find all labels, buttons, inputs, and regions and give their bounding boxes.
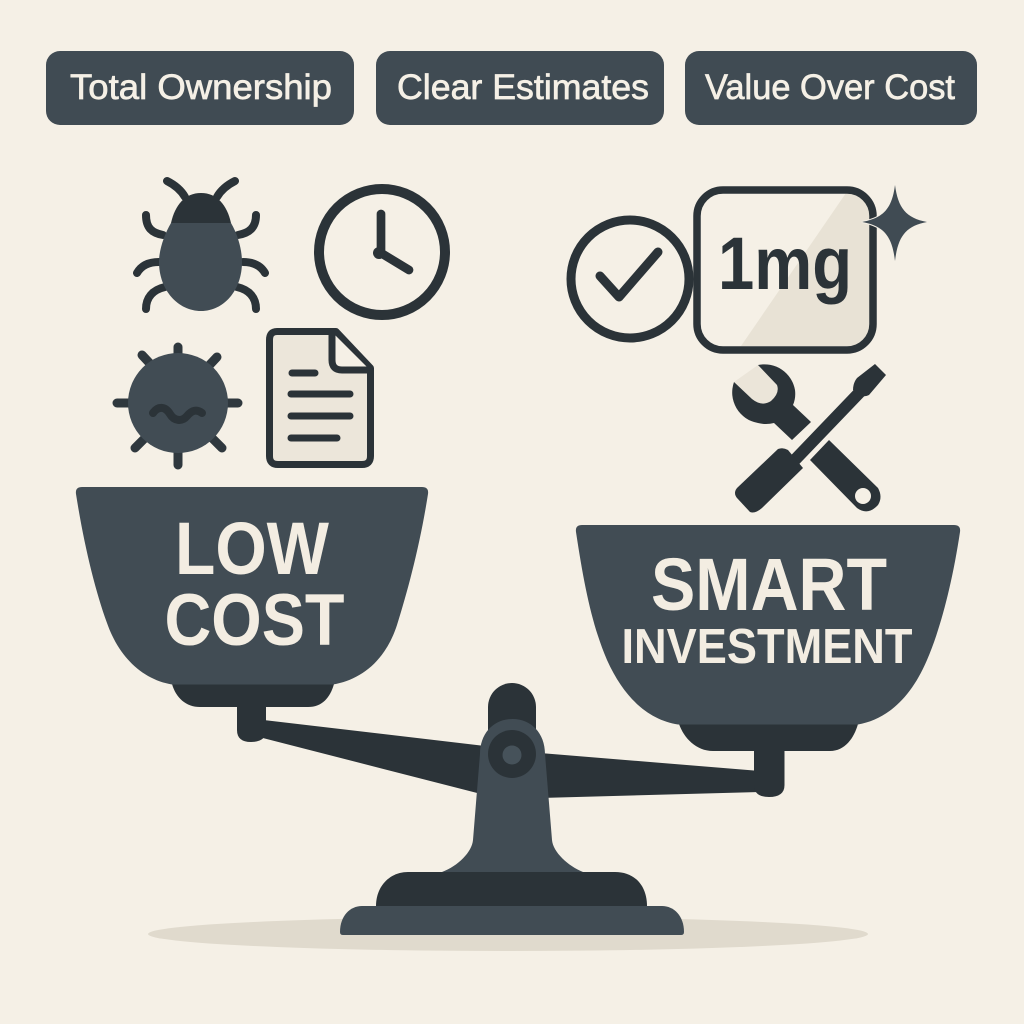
icon: 1mg box: 1mg: [718, 222, 852, 305]
icon: bug: [137, 181, 265, 311]
pill: Clear Estimates: Clear Estimates: [397, 68, 649, 107]
pill: Value Over Cost: [685, 51, 977, 125]
pill: Value Over Cost: Value Over Cost: [705, 68, 955, 107]
scale base: [340, 906, 684, 935]
left pan: Low Cost: COST: [164, 580, 344, 661]
right pan: Smart Investment: SMART: [651, 543, 887, 626]
left pan: Low Cost: LOW: [175, 507, 329, 590]
right pan: Smart Investment: INVESTMENT: [622, 620, 913, 674]
icon: sparkle: [862, 185, 927, 261]
pill: Total Ownership: [46, 51, 354, 125]
scale beam and stand: [237, 683, 784, 906]
icon: virus: [117, 347, 238, 465]
left pan: Low Cost: [76, 487, 428, 707]
pill: Total Ownership: Total Ownership: [70, 68, 332, 107]
icon: check circle: [571, 220, 689, 338]
right pan: Smart Investment: [576, 525, 960, 751]
icon: clock: [319, 189, 445, 315]
icon: 1mg box: [697, 190, 873, 350]
base shadow: [148, 917, 868, 951]
icon: wrench and screwdriver: [732, 364, 886, 512]
pill: Clear Estimates: [376, 51, 664, 125]
icon: document: [270, 332, 370, 464]
